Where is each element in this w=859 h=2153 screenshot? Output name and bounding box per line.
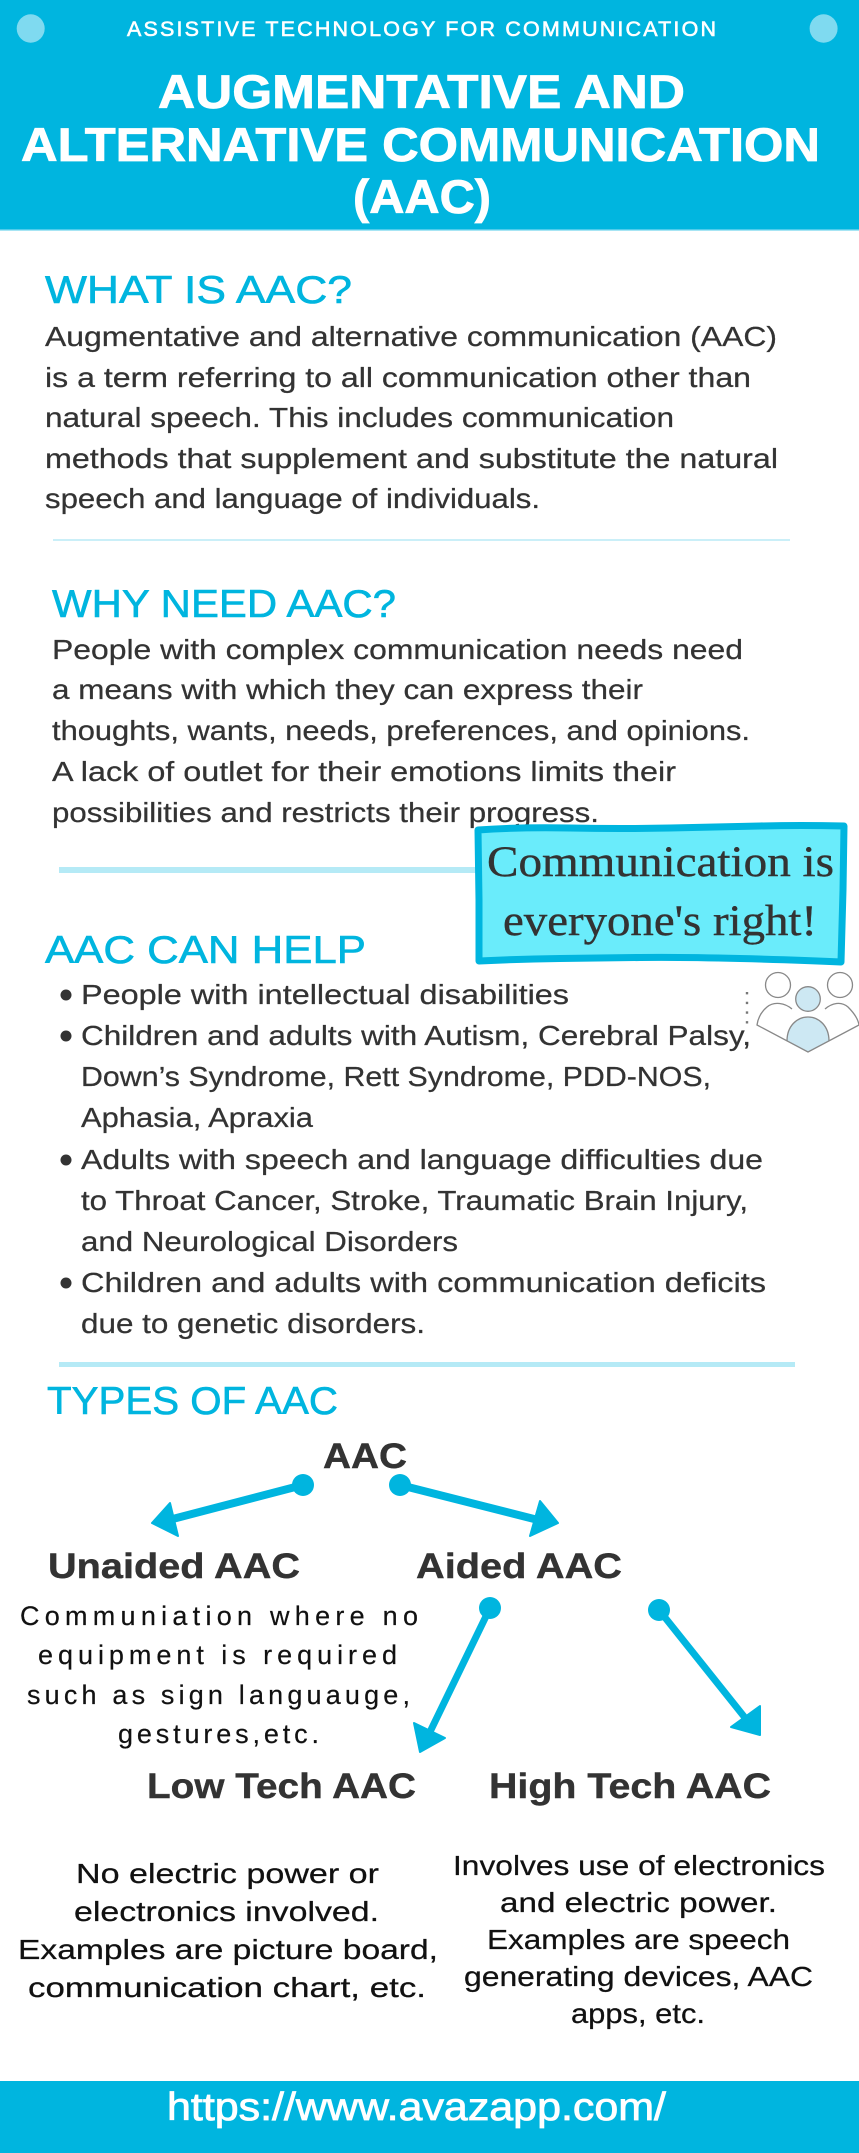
text block: why need AAC: a means with which they can express their [52,674,643,705]
icon: right header dot [810,14,838,43]
arrow: aided to low tech [414,1597,501,1752]
text block: high tech description [453,1850,825,2029]
text block: unaided description: such as sign languauge, [27,1680,410,1710]
text block: unaided description: gestures,etc. [118,1719,319,1749]
text block: why need AAC: possibilities and restricts their progress. [52,797,599,828]
text block: what is AAC: Augmentative and alternative communication (AAC) [45,321,777,352]
arrow: AAC to aided [389,1474,558,1536]
callout: communication is everyone's right: everyone's right! [503,898,817,945]
bullet list: due to genetic disorders. [81,1308,425,1339]
text block: what is AAC: methods that supplement and substitute the natural [45,443,778,474]
footer banner [0,2081,859,2153]
node: AAC: AAC [323,1437,407,1476]
text block: high tech description: and electric power. [500,1887,777,1918]
text block: what is AAC: speech and language of individuals. [45,483,540,514]
bullet list: People with intellectual disabilities [81,979,569,1010]
text block: unaided description [20,1601,418,1749]
panel: AAC can help [45,929,766,1339]
main title [21,65,820,223]
text block: what is AAC: natural speech. This includes communication [45,402,674,433]
text block: low tech description: electronics involved. [74,1896,379,1927]
bullet list: Down’s Syndrome, Rett Syndrome, PDD-NOS, [81,1061,711,1092]
node: high tech AAC: High Tech AAC [489,1767,771,1806]
bullet list: and Neurological Disorders [81,1226,458,1257]
text block: what is AAC [45,321,778,514]
text block: why need AAC [52,634,750,828]
text block: low tech description: No electric power or [76,1858,379,1889]
text block: why need AAC: A lack of outlet for their emotions limits their [52,756,676,787]
text block: high tech description: apps, etc. [571,1998,705,2029]
node: aided AAC: Aided AAC [416,1547,622,1586]
text block: high tech description: Involves use of electronics [453,1850,825,1881]
bullet list: Children and adults with communication deficits [81,1267,766,1298]
main title: AUGMENTATIVE AND [158,65,685,118]
icon: left header dot [17,14,45,43]
heading: why need AAC: WHY NEED AAC? [52,583,396,626]
panel: why need AAC [52,583,750,828]
node: unaided AAC: Unaided AAC [48,1547,300,1586]
node: low tech AAC: Low Tech AAC [147,1767,416,1806]
text block: why need AAC: thoughts, wants, needs, preferences, and opinions. [52,715,750,746]
text block: why need AAC: People with complex communication needs need [52,634,743,665]
bullet list: to Throat Cancer, Stroke, Traumatic Brain Injury, [81,1185,748,1216]
text block: low tech description [18,1858,438,2003]
callout: communication is everyone's right [478,826,844,962]
main title: (AAC) [353,170,491,223]
arrow: AAC to unaided [152,1474,314,1536]
text block: high tech description: Examples are speech [487,1924,790,1955]
heading: types of AAC: TYPES OF AAC [47,1380,338,1423]
callout: communication is everyone's right: Communication is [487,839,834,886]
text block: low tech description: communication chart, etc. [28,1972,426,2003]
bullet list [60,979,766,1339]
main title: ALTERNATIVE COMMUNICATION [21,118,820,171]
text block: high tech description: generating devices, AAC [464,1961,813,1992]
icon: group of people [747,972,859,1052]
heading: what is AAC: WHAT IS AAC? [45,269,352,312]
text block: unaided description: equipment is required [38,1640,397,1670]
panel: what is AAC [45,269,778,514]
header subtitle: ASSISTIVE TECHNOLOGY FOR COMMUNICATION [127,17,716,41]
heading: AAC can help: AAC CAN HELP [45,929,366,972]
bullet list: Children and adults with Autism, Cerebral Palsy, [81,1020,751,1051]
text block: unaided description: Communiation where no [20,1601,418,1631]
text block: what is AAC: is a term referring to all communication other than [45,362,751,393]
text block: low tech description: Examples are picture board, [18,1934,438,1965]
header banner [0,0,859,230]
bullet list: Aphasia, Apraxia [81,1102,313,1133]
panel: types of AAC [18,1380,825,2029]
bullet list: Adults with speech and language difficulties due [81,1144,763,1175]
footer banner: https://www.avazapp.com/ [167,2086,666,2129]
arrow: aided to high tech [648,1599,760,1735]
